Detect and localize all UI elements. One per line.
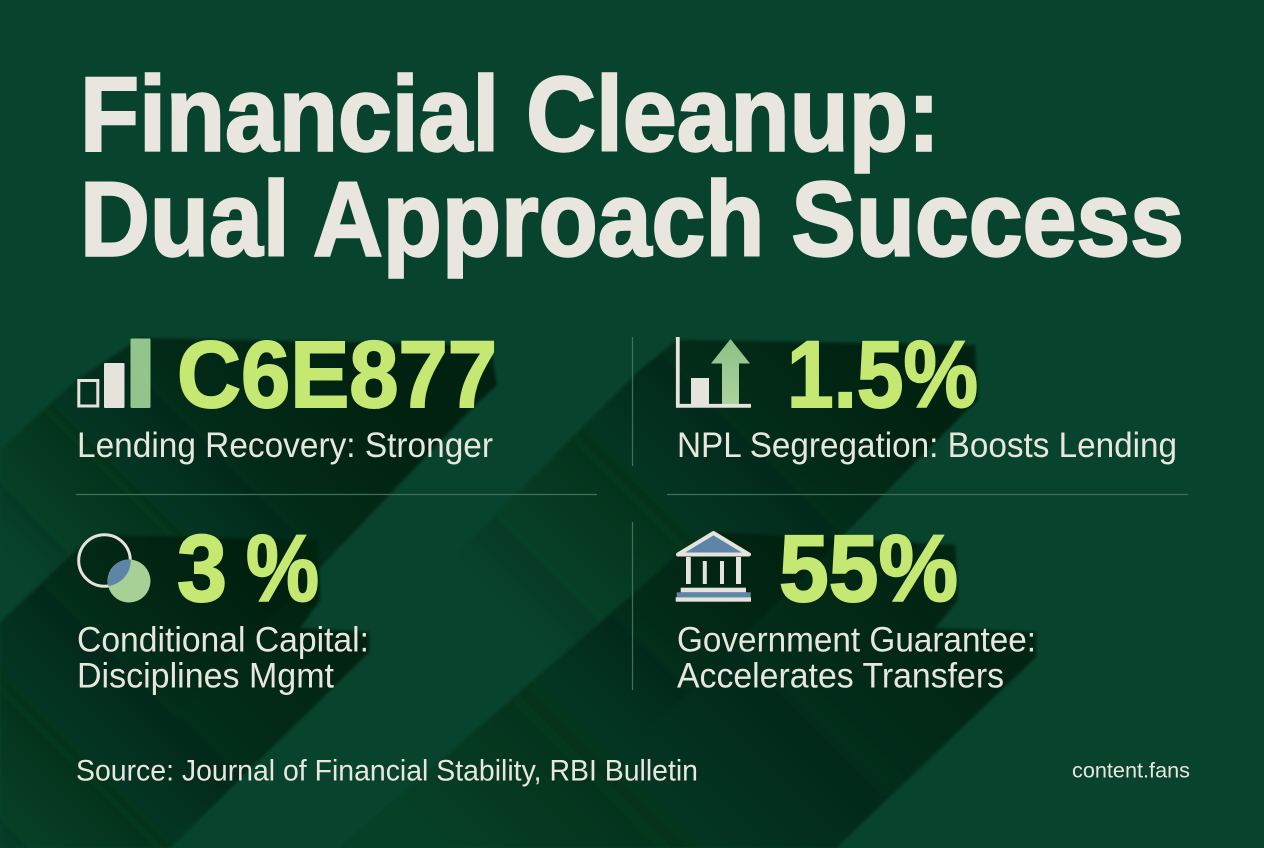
- label: Disciplines Mgmt: [77, 656, 334, 696]
- label: Lending Recovery: Stronger: [77, 426, 493, 465]
- label: Accelerates Transfers: [677, 656, 1004, 696]
- stat value: 3: [177, 516, 227, 622]
- source note: Source: Journal of Financial Stability, RBI Bulletin: [76, 754, 698, 788]
- panel: conditional capital: [77, 516, 369, 696]
- label: Conditional Capital:: [77, 620, 369, 660]
- title: [80, 56, 1184, 278]
- brand credit: content.fans: [1072, 760, 1190, 782]
- panel: lending recovery: [77, 322, 497, 465]
- stat value: [177, 516, 319, 622]
- icon: bar chart with up arrow: [678, 337, 751, 406]
- stat value: %: [246, 516, 319, 622]
- title: Dual Approach Success: [80, 160, 1184, 278]
- icon: bar chart: [79, 338, 150, 408]
- label: [677, 620, 1036, 696]
- panel: NPL segregation: [677, 322, 1177, 465]
- icon: bank building: [676, 533, 751, 602]
- label: Government Guarantee:: [677, 620, 1036, 660]
- panel: government guarantee: [676, 516, 1036, 696]
- label: [77, 620, 369, 696]
- stat value: 1.5%: [787, 322, 978, 428]
- label: NPL Segregation: Boosts Lending: [677, 426, 1177, 465]
- stat value: 55%: [779, 516, 958, 622]
- title: Financial Cleanup:: [80, 56, 940, 174]
- icon: overlapping circles: [79, 535, 150, 602]
- stat value: C6E877: [177, 322, 497, 428]
